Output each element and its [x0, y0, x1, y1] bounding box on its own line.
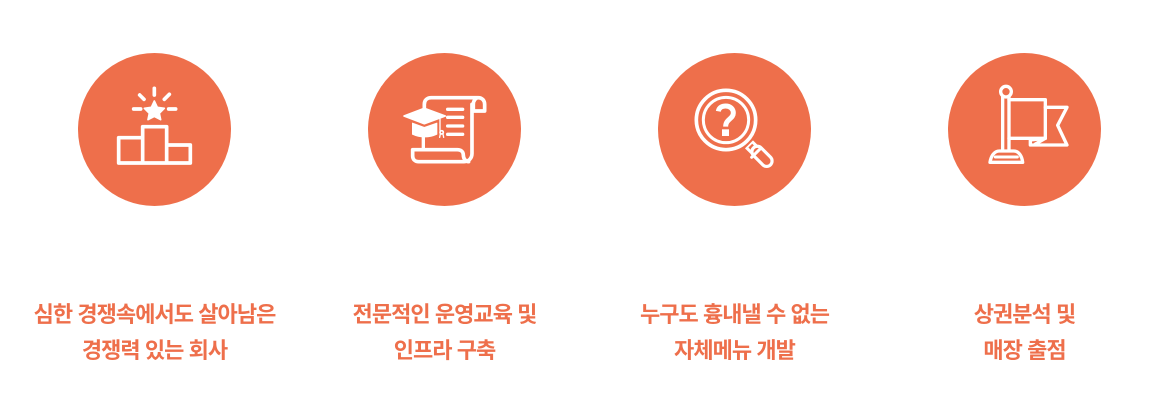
- caption: professional training: [353, 302, 536, 363]
- caption: trade area analysis: 상권분석 및: [974, 302, 1075, 327]
- icon: magnifying glass with question mark: [658, 53, 811, 206]
- caption: trade area analysis: [974, 302, 1075, 363]
- caption: easy menu development: 누구도 흉내낼 수 없는: [640, 302, 829, 327]
- caption: competitive company: 경쟁력 있는 회사: [82, 338, 227, 363]
- caption: trade area analysis: 매장 출점: [983, 338, 1066, 363]
- caption: competitive company: 심한 경쟁속에서도 살아남은: [34, 302, 275, 327]
- icon: flag on a pole: [948, 53, 1101, 206]
- caption: easy menu development: [640, 302, 830, 363]
- icon: podium with star: [78, 53, 231, 206]
- caption: professional training: 전문적인 운영교육 및: [353, 302, 536, 327]
- icon: diploma scroll and graduation cap: [368, 53, 521, 206]
- caption: professional training: 인프라 구축: [394, 338, 495, 363]
- caption: competitive company: [34, 302, 276, 363]
- caption: easy menu development: 자체메뉴 개발: [674, 338, 795, 363]
